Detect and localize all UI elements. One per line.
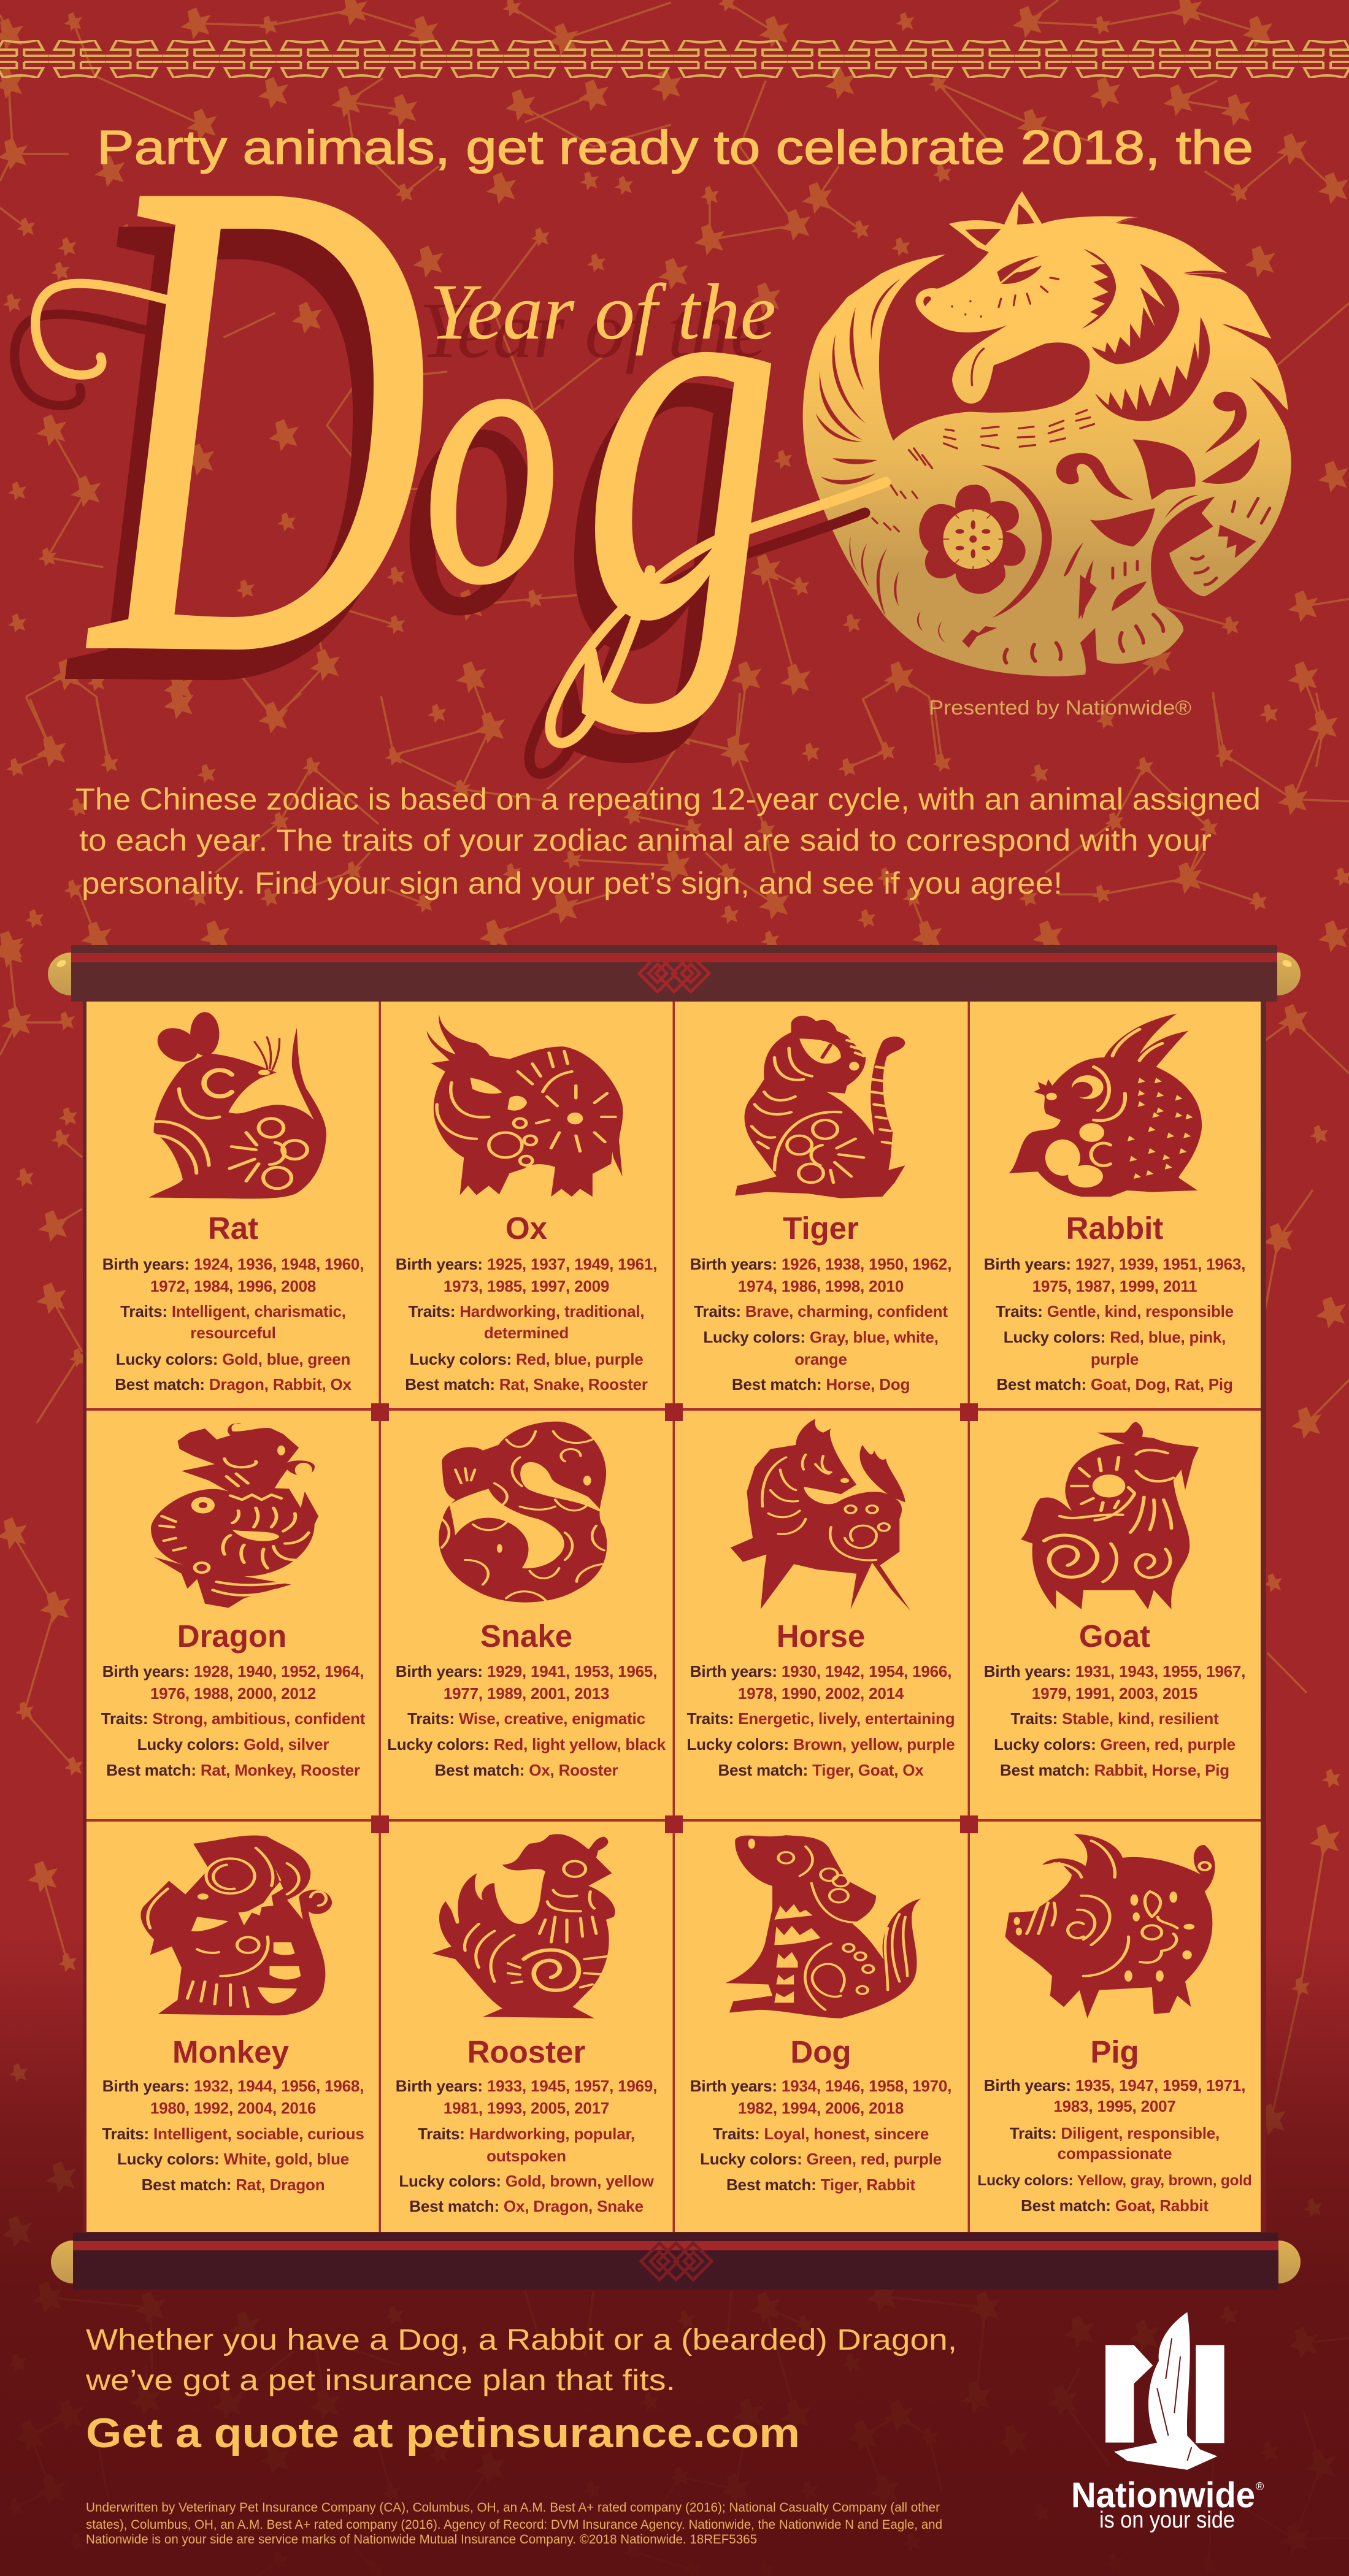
details: tiger: Lucky colors: Gray, blue, white,: [703, 1328, 939, 1346]
details: monkey: Birth years: 1932, 1944, 1956, 1968,: [102, 2077, 364, 2095]
details: pig: compassionate: [1058, 2144, 1172, 2163]
details: rat: Traits: Intelligent, charismatic,: [120, 1302, 346, 1321]
icon: tiger: [735, 1016, 905, 1198]
fine print: Nationwide is on your side are service marks of Nationwide Mutual Insurance Company. ©2018 Nationwide. 18REF5365: [86, 2532, 757, 2547]
details: tiger: orange: [794, 1350, 847, 1368]
name: dog: Dog: [790, 2034, 851, 2069]
details: goat: Best match: Rabbit, Horse, Pig: [1000, 1761, 1229, 1779]
details: rooster: [396, 2077, 657, 2215]
details: pig: [977, 2076, 1252, 2215]
details: ox: 1973, 1985, 1997, 2009: [444, 1277, 609, 1295]
details: rat: Birth years: 1924, 1936, 1948, 1960,: [102, 1255, 364, 1273]
ear and face cutouts: [923, 204, 1210, 421]
title lettering: Dog: [36, 36, 886, 796]
details: rooster: Traits: Hardworking, popular,: [418, 2125, 635, 2143]
details: dragon: 1976, 1988, 2000, 2012: [150, 1684, 316, 1703]
details: dog: Best match: Tiger, Rabbit: [726, 2175, 916, 2194]
details: pig: Lucky colors: Yellow, gray, brown, gold: [977, 2172, 1252, 2189]
details: dog: Birth years: 1934, 1946, 1958, 1970,: [690, 2077, 951, 2095]
details: rooster: Lucky colors: Gold, brown, yellow: [399, 2172, 655, 2190]
details: goat: 1979, 1991, 2003, 2015: [1032, 1684, 1197, 1703]
details: horse: [686, 1662, 955, 1779]
details: snake: Lucky colors: Red, light yellow, black: [387, 1735, 666, 1754]
details: snake: Traits: Wise, creative, enigmatic: [407, 1709, 645, 1728]
details: dog: Traits: Loyal, honest, sincere: [713, 2125, 929, 2143]
closing message: we’ve got a pet insurance plan that fits.: [85, 2364, 675, 2397]
name: monkey: Monkey: [172, 2034, 290, 2069]
details: dragon: [101, 1662, 366, 1779]
icon: dragon: [151, 1423, 318, 1608]
details: monkey: 1980, 1992, 2004, 2016: [150, 2099, 316, 2117]
details: rat: Best match: Dragon, Rabbit, Ox: [115, 1375, 352, 1393]
flourish tail of the g: [550, 482, 886, 743]
details: horse: 1978, 1990, 2002, 2014: [738, 1684, 904, 1703]
panel: goat: [969, 1409, 1261, 1820]
icon: ox: [426, 1014, 623, 1197]
panel: ox: [380, 1002, 674, 1409]
details: rooster: outspoken: [486, 2147, 566, 2165]
call to action: Get a quote at petinsurance.com: [86, 2410, 800, 2456]
details: ox: determined: [484, 1324, 569, 1342]
script line: Year of the: Year of the: [429, 268, 776, 356]
details: monkey: Traits: Intelligent, sociable, curious: [102, 2125, 364, 2143]
details: horse: Best match: Tiger, Goat, Ox: [718, 1761, 924, 1779]
intro paragraph: [75, 782, 1261, 900]
details: dog: 1982, 1994, 2006, 2018: [738, 2099, 904, 2117]
name: dragon: Dragon: [177, 1619, 286, 1654]
flower emblem: [919, 485, 1026, 594]
logo: Nationwide eagle and N: ®: [1256, 2480, 1264, 2493]
icon: dog: [725, 1835, 921, 2018]
name: goat: Goat: [1079, 1619, 1150, 1654]
scroll: top roller: [48, 945, 1301, 1002]
fine print: states), Columbus, OH, an A.M. Best A+ rated company (2016). Agency of Record: DVM Insurance Agency. Nationwide, the Nationwide N and Eagle, and: [86, 2518, 942, 2532]
details: monkey: Lucky colors: White, gold, blue: [117, 2150, 349, 2168]
name: rabbit: Rabbit: [1066, 1211, 1163, 1246]
letter g: g: [583, 121, 782, 734]
name: ox: Ox: [505, 1211, 547, 1246]
icon: rooster: [432, 1834, 615, 2018]
details: dragon: Birth years: 1928, 1940, 1952, 1964,: [102, 1662, 364, 1681]
icon: snake: [439, 1422, 607, 1603]
details: rooster: Best match: Ox, Dragon, Snake: [409, 2197, 644, 2215]
details: rat: Lucky colors: Gold, blue, green: [116, 1350, 350, 1368]
panel: monkey: [86, 1820, 380, 2232]
details: rooster: 1981, 1993, 2005, 2017: [444, 2099, 609, 2117]
name: pig: Pig: [1090, 2034, 1139, 2069]
details: dog: Lucky colors: Green, red, purple: [700, 2150, 942, 2168]
details: snake: 1977, 1989, 2001, 2013: [444, 1684, 609, 1703]
fine print: Underwritten by Veterinary Pet Insurance Company (CA), Columbus, OH, an A.M. Best A+ rated company (2016); National Casualty Company (all other: [86, 2501, 940, 2515]
details: ox: Lucky colors: Red, blue, purple: [410, 1350, 643, 1368]
panel: tiger: [674, 1002, 969, 1409]
letter D: D: [85, 36, 429, 796]
details: rat: 1972, 1984, 1996, 2008: [150, 1277, 316, 1295]
details: monkey: [102, 2077, 364, 2194]
icon: goat: [1021, 1422, 1199, 1609]
details: dragon: Traits: Strong, ambitious, confident: [101, 1709, 366, 1728]
illustration: gold paper-cut dog: [803, 191, 1291, 677]
details: goat: [984, 1662, 1245, 1779]
details: horse: Birth years: 1930, 1942, 1954, 1966,: [690, 1662, 951, 1681]
body curls and leaves: [962, 217, 1289, 663]
details: dragon: Lucky colors: Gold, silver: [137, 1735, 329, 1754]
details: snake: [387, 1662, 666, 1779]
panel: dragon: [86, 1409, 380, 1820]
details: pig: 1983, 1995, 2007: [1053, 2097, 1176, 2115]
details: ox: Traits: Hardworking, traditional,: [409, 1302, 644, 1321]
panel: rabbit: [969, 1002, 1261, 1409]
details: snake: Birth years: 1929, 1941, 1953, 1965,: [396, 1662, 657, 1681]
details: rabbit: Birth years: 1927, 1939, 1951, 1963,: [984, 1255, 1245, 1273]
details: rat: resourceful: [190, 1324, 276, 1342]
details: pig: Best match: Goat, Rabbit: [1021, 2196, 1209, 2215]
details: dog: [690, 2077, 951, 2194]
details: ox: [396, 1255, 657, 1393]
scroll: yellow sheet frame: [83, 1002, 1266, 2233]
letter o: o: [423, 241, 560, 662]
fine print: [86, 2501, 942, 2547]
details: rat: [102, 1255, 364, 1393]
closing message: [85, 2324, 957, 2397]
details: goat: Birth years: 1931, 1943, 1955, 1967,: [984, 1662, 1245, 1681]
icon: pig: [1005, 1834, 1215, 2018]
panel: pig: [969, 1820, 1261, 2232]
heading: party animals line: Party animals, get ready to celebrate 2018, the: [97, 120, 1253, 174]
details: goat: Traits: Stable, kind, resilient: [1010, 1709, 1219, 1728]
panel: rooster: [380, 1820, 674, 2232]
details: snake: Best match: Ox, Rooster: [435, 1761, 618, 1779]
logo: Nationwide eagle and N: Nationwide: [1071, 2475, 1255, 2515]
details: rabbit: Best match: Goat, Dog, Rat, Pig: [996, 1375, 1233, 1393]
details: rabbit: purple: [1091, 1350, 1139, 1368]
details: goat: Lucky colors: Green, red, purple: [994, 1735, 1236, 1754]
panel: snake: [380, 1409, 674, 1820]
details: pig: Birth years: 1935, 1947, 1959, 1971,: [984, 2076, 1245, 2095]
details: monkey: Best match: Rat, Dragon: [142, 2175, 325, 2194]
details: horse: Traits: Energetic, lively, entertaining: [687, 1709, 955, 1728]
scroll: bottom roller: [51, 2233, 1301, 2290]
icon: rabbit: [1009, 1014, 1202, 1197]
details: rabbit: Lucky colors: Red, blue, pink,: [1004, 1328, 1226, 1346]
details: rabbit: Traits: Gentle, kind, responsible: [996, 1302, 1234, 1321]
details: ox: Best match: Rat, Snake, Rooster: [405, 1375, 648, 1393]
details: tiger: Birth years: 1926, 1938, 1950, 1962,: [690, 1255, 951, 1273]
details: horse: Lucky colors: Brown, yellow, purple: [686, 1735, 955, 1754]
intro paragraph: to each year. The traits of your zodiac animal are said to correspond with your: [79, 823, 1212, 857]
name: rat: Rat: [208, 1211, 258, 1246]
details: pig: Traits: Diligent, responsible,: [1010, 2124, 1220, 2142]
details: rabbit: 1975, 1987, 1999, 2011: [1032, 1277, 1197, 1295]
name: horse: Horse: [777, 1619, 865, 1654]
panel: rat: [86, 1002, 380, 1409]
details: tiger: 1974, 1986, 1998, 2010: [738, 1277, 904, 1295]
details: rabbit: [984, 1255, 1245, 1393]
icon: monkey: [140, 1836, 332, 2015]
details: rooster: Birth years: 1933, 1945, 1957, 1969,: [396, 2077, 657, 2095]
details: dragon: Best match: Rat, Monkey, Rooster: [106, 1761, 360, 1779]
closing message: Whether you have a Dog, a Rabbit or a (bearded) Dragon,: [86, 2324, 957, 2356]
details: tiger: [690, 1255, 951, 1393]
icon: horse: [731, 1419, 910, 1611]
icon: rat: [149, 1012, 326, 1198]
intro paragraph: personality. Find your sign and your pet’s sign, and see if you agree!: [82, 866, 1063, 900]
decorative lattice border: [0, 40, 1349, 78]
details: tiger: Traits: Brave, charming, confident: [694, 1302, 948, 1321]
details: ox: Birth years: 1925, 1937, 1949, 1961,: [396, 1255, 657, 1273]
name: snake: Snake: [480, 1619, 572, 1654]
tail and flank fur cutouts: [816, 278, 1094, 643]
name: tiger: Tiger: [783, 1211, 859, 1246]
name: rooster: Rooster: [467, 2034, 585, 2069]
flourish on the D: [36, 283, 184, 375]
credit: presented by: Presented by Nationwide®: [929, 696, 1191, 719]
logo: Nationwide eagle and N: is on your side: [1099, 2507, 1235, 2533]
panel: horse: [674, 1409, 969, 1820]
panel: dog: [674, 1820, 969, 2232]
details: tiger: Best match: Horse, Dog: [732, 1375, 910, 1393]
logo: Nationwide eagle and N: [1071, 2312, 1264, 2533]
intro paragraph: The Chinese zodiac is based on a repeating 12-year cycle, with an animal assigned: [75, 782, 1261, 816]
